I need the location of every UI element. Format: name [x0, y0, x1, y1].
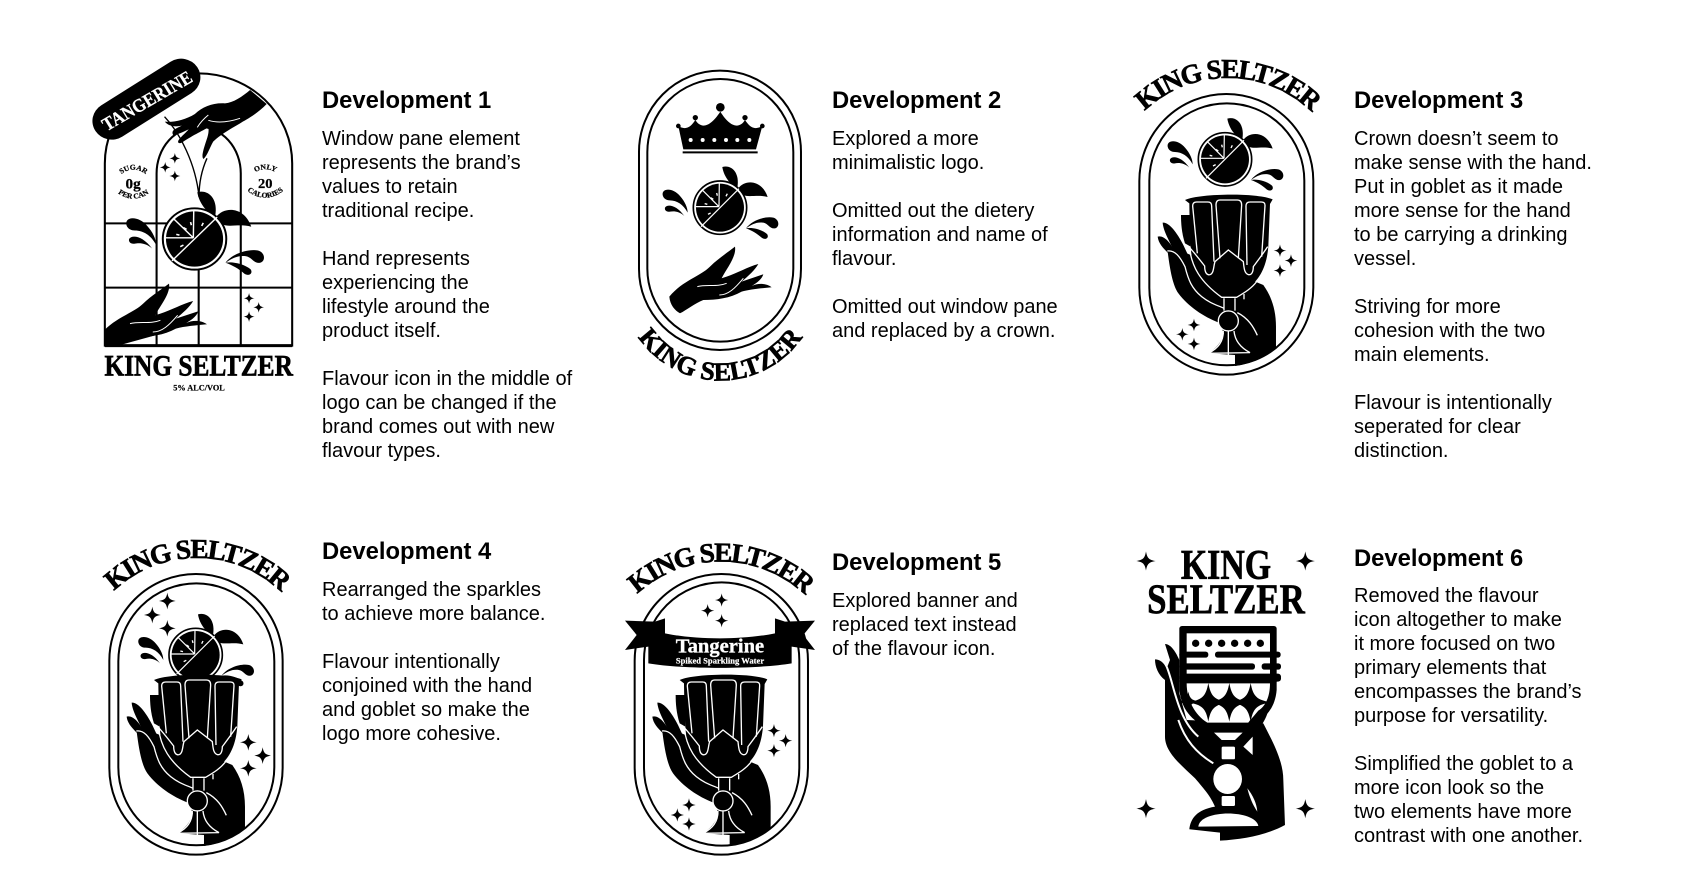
heading: development 1: Development 1 — [322, 87, 491, 114]
logo: development 3 — [1133, 60, 1320, 376]
text: development 1 notes: Window pane element — [322, 128, 520, 150]
dietary info: sugar — [118, 164, 148, 199]
icon: tangerine slice — [1168, 118, 1283, 191]
wordmark: KING — [1181, 542, 1271, 589]
wordmark — [1147, 542, 1306, 624]
icon: hand — [669, 247, 772, 313]
sparkles — [144, 593, 271, 777]
text: development 3 notes: main elements. — [1354, 344, 1490, 366]
text: development 3 notes: Striving for more — [1354, 296, 1501, 318]
sparkles — [1176, 244, 1297, 350]
sparkles — [1136, 551, 1315, 818]
icon: hand holding goblet — [127, 675, 245, 846]
sparkles — [671, 593, 792, 831]
sparkles — [160, 153, 264, 322]
dietary info: calories: ONLY — [254, 164, 278, 172]
dietary info: sugar: 0g — [126, 177, 141, 193]
icon: tangerine slice — [126, 192, 264, 275]
text: development 4 notes: logo more cohesive. — [322, 723, 501, 745]
heading: development 3: Development 3 — [1354, 87, 1523, 114]
text: development 3 notes — [1354, 128, 1592, 462]
dietary info: calories — [248, 164, 283, 198]
badge frame — [1139, 94, 1313, 375]
icon: bottom hand — [106, 284, 207, 344]
wordmark: KING SELTZER — [104, 350, 293, 383]
text: development 1 notes: traditional recipe. — [322, 200, 474, 222]
heading: development 6: Development 6 — [1354, 545, 1523, 572]
text: development 2 notes: Omitted out the dietery — [832, 200, 1034, 222]
text: development 2 notes: Explored a more — [832, 128, 979, 150]
text: development 2 notes: Omitted out window pane — [832, 296, 1058, 318]
wordmark: KING SELTZER — [638, 326, 804, 381]
tangerine flavour pill: TANGERINE — [98, 67, 196, 136]
text: development 5 notes: replaced text instead — [832, 614, 1017, 636]
text: development 4 notes: Flavour intentionally — [322, 651, 500, 673]
text: development 1 notes: flavour types. — [322, 440, 441, 462]
text: development 2 notes: flavour. — [832, 248, 896, 270]
text: development 3 notes: Crown doesn’t seem to — [1354, 128, 1559, 150]
alcohol by volume label: 5% ALC/VOL — [173, 384, 225, 393]
heading: development 4: Development 4 — [322, 538, 491, 565]
text: development 6 notes — [1354, 585, 1583, 847]
icon: hand holding goblet — [652, 675, 771, 846]
icon: simplified hand holding goblet — [1155, 626, 1285, 841]
wordmark: KING SELTZER — [1133, 60, 1320, 112]
text: development 6 notes: icon altogether to make — [1354, 609, 1562, 631]
text: development 1 notes: product itself. — [322, 320, 441, 342]
text: development 3 notes: to be carrying a drinking — [1354, 224, 1567, 246]
text: development 6 notes: encompasses the brand’s — [1354, 681, 1582, 703]
text: development 1 notes: Flavour icon in the middle of — [322, 368, 572, 390]
flavour banner: Spiked Sparkling Water — [676, 656, 764, 666]
text: development 3 notes: make sense with the hand. — [1354, 152, 1592, 174]
text: development 4 notes: Rearranged the sparkles — [322, 579, 541, 601]
icon: tangerine slice — [663, 166, 778, 239]
text: development 6 notes: it more focused on two — [1354, 633, 1555, 655]
text: development 3 notes: distinction. — [1354, 440, 1448, 462]
dietary info: calories: CALORIES — [248, 187, 283, 198]
text: development 3 notes: cohesion with the two — [1354, 320, 1545, 342]
text: development 1 notes — [322, 128, 572, 462]
text: development 6 notes: purpose for versatility. — [1354, 705, 1548, 727]
text: development 6 notes: more icon look so the — [1354, 777, 1544, 799]
icon: crown — [676, 103, 765, 152]
icon: tangerine slice — [138, 614, 254, 686]
text: development 6 notes: two elements have more — [1354, 801, 1572, 823]
wordmark: KING SELTZER — [102, 540, 289, 593]
badge frame — [639, 71, 801, 350]
icon: top hand — [165, 90, 267, 159]
text: development 3 notes: Flavour is intentionally — [1354, 392, 1552, 414]
text: development 1 notes: brand comes out with new — [322, 416, 554, 438]
text: development 2 notes: minimalistic logo. — [832, 152, 984, 174]
text: development 5 notes: of the flavour icon. — [832, 638, 995, 660]
window pane frame — [105, 73, 292, 346]
wordmark: KING SELTZER — [626, 543, 813, 596]
dietary info: sugar: SUGAR — [119, 164, 148, 174]
wordmark: SELTZER — [1147, 577, 1306, 624]
text: development 1 notes: logo can be changed if the — [322, 392, 557, 414]
text: development 2 notes: and replaced by a crown. — [832, 320, 1055, 342]
icon: hand holding goblet — [1158, 195, 1276, 366]
logo: development 2 — [638, 70, 804, 381]
text: development 1 notes: experiencing the — [322, 272, 469, 294]
text: development 4 notes: to achieve more balance. — [322, 603, 545, 625]
dietary info: calories: 20 — [258, 176, 273, 192]
text: development 1 notes: lifestyle around the — [322, 296, 490, 318]
flavour banner: Tangerine — [676, 636, 764, 658]
badge frame — [109, 574, 283, 855]
text: development 5 notes: Explored banner and — [832, 590, 1018, 612]
text: development 1 notes: Hand represents — [322, 248, 470, 270]
text: development 6 notes: Removed the flavour — [1354, 585, 1539, 607]
text: development 6 notes: primary elements that — [1354, 657, 1546, 679]
dietary info: sugar: PER CAN — [118, 189, 148, 199]
text: development 3 notes: Put in goblet as it made — [1354, 176, 1563, 198]
heading: development 5: Development 5 — [832, 549, 1001, 576]
text: development 4 notes: conjoined with the hand — [322, 675, 532, 697]
text: development 3 notes: seperated for clear — [1354, 416, 1521, 438]
logo: development 4 — [102, 540, 289, 856]
text: development 2 notes — [832, 128, 1058, 342]
text: development 5 notes — [832, 590, 1018, 660]
text: development 3 notes: more sense for the hand — [1354, 200, 1571, 222]
text: development 1 notes: values to retain — [322, 176, 458, 198]
badge frame — [635, 574, 808, 855]
heading: development 2: Development 2 — [832, 87, 1001, 114]
text: development 4 notes: and goblet so make the — [322, 699, 530, 721]
logo: development 5 — [625, 543, 815, 856]
text: development 6 notes: contrast with one another. — [1354, 825, 1583, 847]
text: development 2 notes: information and name of — [832, 224, 1048, 246]
logo: development 1 — [92, 58, 294, 393]
text: development 3 notes: vessel. — [1354, 248, 1416, 270]
text: development 4 notes — [322, 579, 545, 745]
flavour banner — [625, 618, 815, 668]
text: development 1 notes: represents the brand’s — [322, 152, 521, 174]
text: development 6 notes: Simplified the goblet to a — [1354, 753, 1573, 775]
logo: development 6 — [1136, 542, 1315, 841]
